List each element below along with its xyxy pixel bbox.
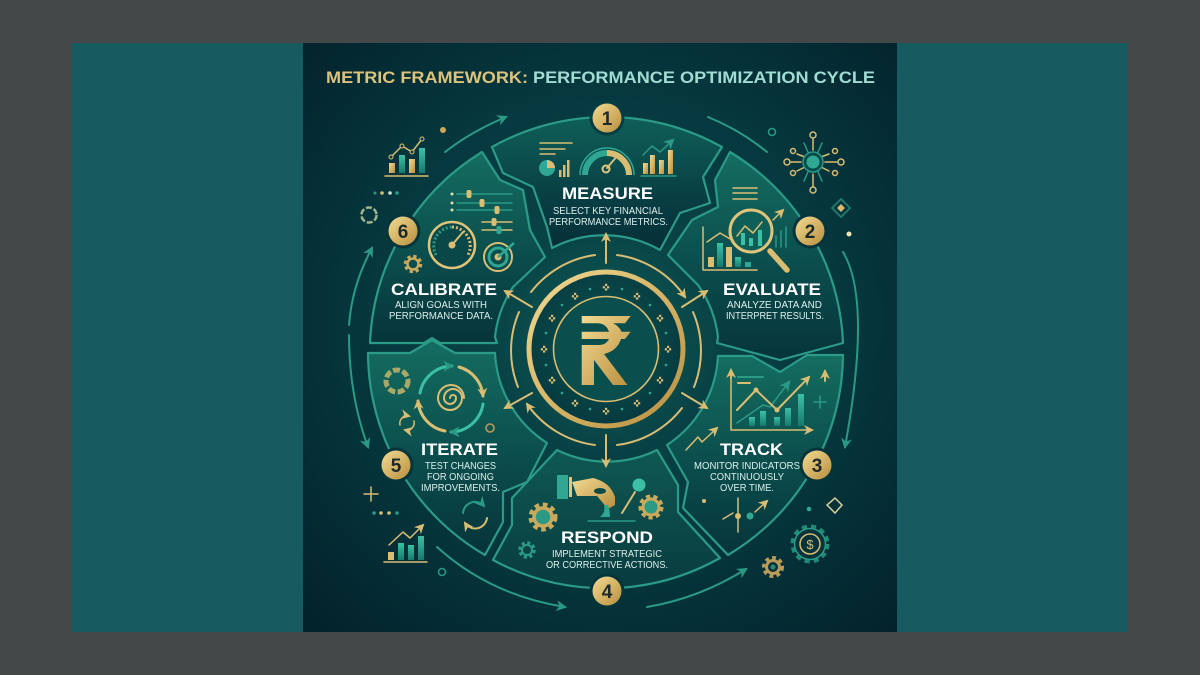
description: calibrate: ALIGN GOALS WITH: [395, 299, 487, 311]
icon: rupee symbol: [582, 316, 631, 385]
decorative icons: lower right: [764, 498, 842, 576]
icon: zigzag arrow: [686, 428, 717, 450]
badge 3: 3: [812, 456, 822, 477]
icon: target: [484, 243, 514, 271]
icon: speedometer: [580, 148, 634, 175]
icon: refresh: [463, 502, 487, 529]
badge 6: 6: [398, 222, 408, 243]
panel: measure: [492, 117, 722, 250]
description: measure: [549, 205, 668, 228]
decorative icons: lower left: [364, 487, 446, 576]
icon: network hub: [784, 132, 844, 193]
panel shape: evaluate: [668, 152, 843, 360]
panel: calibrate: [370, 152, 545, 343]
description: evaluate: INTERPRET RESULTS.: [726, 310, 824, 322]
heading: iterate: ITERATE: [421, 440, 498, 459]
description: iterate: IMPROVEMENTS.: [421, 482, 500, 494]
heading: track: TRACK: [720, 440, 784, 459]
badge 3: [800, 448, 834, 482]
plus sign: [364, 487, 378, 501]
icon: sliders: [450, 190, 512, 234]
description: track: OVER TIME.: [720, 482, 774, 494]
icon: dollar gear: $: [806, 537, 814, 552]
coin disc: [529, 272, 683, 426]
panel shape: calibrate: [370, 152, 545, 343]
description: respond: IMPLEMENT STRATEGIC: [552, 548, 662, 560]
heading: calibrate: CALIBRATE: [391, 280, 497, 299]
badge 6: [386, 214, 420, 248]
heading: respond: RESPOND: [561, 528, 653, 547]
panel shape: track: [667, 355, 843, 555]
description: measure: SELECT KEY FINANCIAL: [553, 205, 663, 217]
icon: bar and pie summary: [539, 143, 572, 177]
heading: evaluate: EVALUATE: [723, 280, 821, 299]
dots row: [372, 511, 399, 515]
description: calibrate: PERFORMANCE DATA.: [389, 310, 493, 322]
icon: small chart: [385, 137, 428, 176]
panel: track: [667, 355, 843, 555]
dots row: [374, 191, 399, 195]
icon: growth chart: [384, 525, 427, 562]
panel: evaluate: [668, 152, 843, 360]
description: track: [694, 460, 800, 494]
rupee coin: [529, 272, 683, 426]
inner ring: [554, 296, 658, 402]
decorative icons: upper left: [362, 127, 446, 222]
panel: iterate: [368, 340, 547, 555]
icon: teal gear: [520, 543, 534, 557]
coin ornaments: [541, 284, 671, 415]
description: evaluate: [726, 299, 824, 322]
title: [326, 68, 875, 87]
description: respond: OR CORRECTIVE ACTIONS.: [546, 559, 668, 571]
number badges: [378, 100, 834, 608]
icon: diamond: [832, 199, 850, 217]
panel shape: iterate: [368, 340, 547, 555]
badge 5: 5: [391, 456, 402, 477]
title: PERFORMANCE OPTIMIZATION CYCLE: [533, 68, 875, 87]
badge 5: [378, 448, 414, 482]
icon: gold gear: [764, 558, 782, 576]
badge 4: 4: [602, 582, 613, 603]
badge 1: 1: [602, 109, 613, 130]
gold dot: [440, 127, 446, 133]
icon: gold gear left: [531, 505, 555, 529]
icon: calibration gauge: [429, 222, 475, 268]
description: respond: [546, 548, 668, 571]
badge 4: [590, 574, 624, 608]
icon: trend chart: [731, 370, 826, 430]
icon: hollow diamond: [827, 498, 842, 513]
icon: dashed ring: [362, 208, 376, 222]
icon: iteration cycle: [418, 366, 483, 432]
heading: measure: MEASURE: [562, 184, 653, 203]
small ring: [438, 568, 446, 576]
description: iterate: FOR ONGOING: [427, 471, 494, 483]
icon: small refresh: [400, 416, 494, 432]
centre arrows: [505, 234, 707, 466]
description: iterate: [421, 460, 500, 494]
small ring: [768, 128, 776, 136]
teal dot: [807, 507, 811, 511]
badge 2: [792, 214, 828, 248]
centre backing disc: [493, 236, 719, 462]
icon: segmented ring: [386, 370, 408, 392]
icon: signal controls: [702, 498, 767, 532]
pale dot: [846, 232, 852, 236]
panel shape: measure: [492, 117, 722, 250]
decorative icons: upper right: [768, 128, 852, 236]
icon: gear: [406, 257, 420, 271]
badge 1: [590, 100, 624, 136]
description: calibrate: [389, 299, 493, 322]
description: track: MONITOR INDICATORS: [694, 460, 800, 472]
icon: magnified chart: [703, 188, 787, 270]
description: track: CONTINUOUSLY: [710, 471, 784, 483]
teal side band: [72, 43, 1128, 632]
outer cycle arrows: [349, 117, 858, 607]
badge 2: 2: [805, 222, 815, 243]
icon: rising bar chart: [641, 140, 676, 176]
panel shape: respond: [493, 450, 720, 588]
panel: respond: [493, 450, 720, 588]
poster background: [303, 43, 897, 632]
description: measure: PERFORMANCE METRICS.: [549, 216, 668, 228]
title: METRIC FRAMEWORK:: [326, 68, 528, 87]
description: iterate: TEST CHANGES: [425, 460, 496, 472]
icon: hand on lever: [557, 475, 646, 521]
description: evaluate: ANALYZE DATA AND: [727, 299, 822, 311]
icon: gold gear right: [641, 497, 661, 517]
